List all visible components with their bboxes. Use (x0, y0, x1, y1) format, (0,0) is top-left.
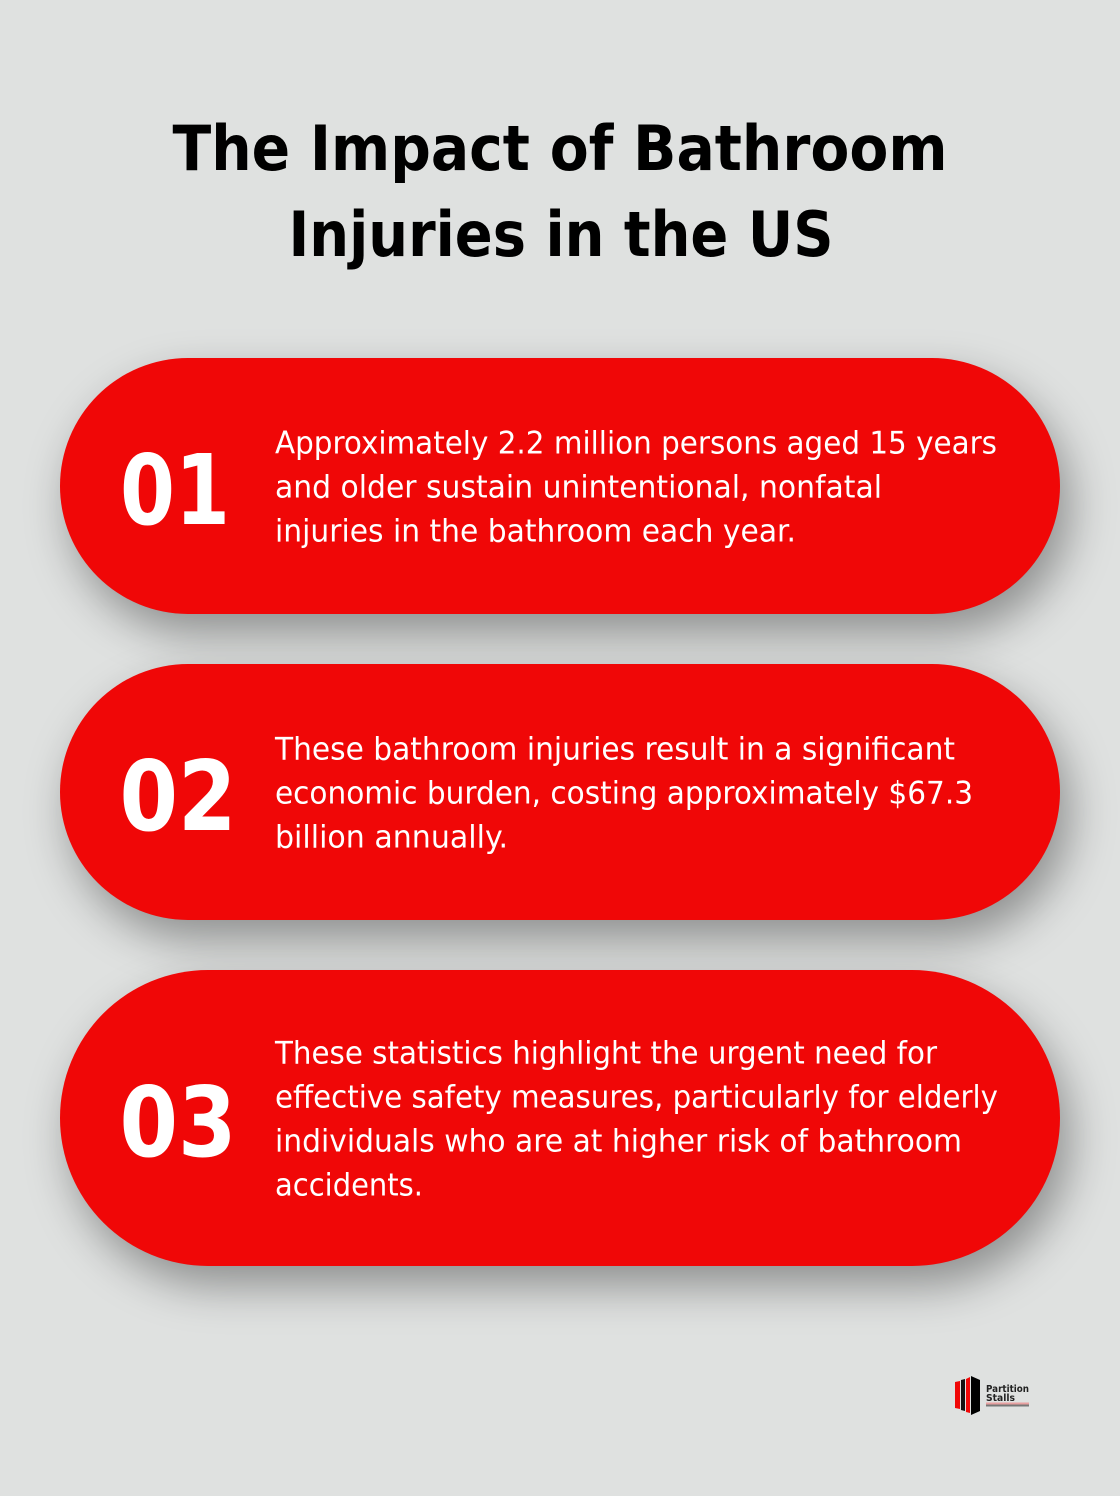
text block: card 01: Approximately 2.2 million persons aged 15 years (275, 426, 997, 462)
title (172, 112, 948, 271)
logo: Partition Stalls: Stalls (986, 1393, 1015, 1404)
text block: card 03: These statistics highlight the urgent need for (274, 1036, 937, 1072)
title: Injuries in the US (288, 198, 834, 271)
logo: Partition Stalls: Partition (986, 1384, 1029, 1395)
text block: card 03: individuals who are at higher risk of bathroom (275, 1124, 962, 1160)
text block: card 02: These bathroom injuries result in a significant (274, 732, 955, 768)
panel: card 01 background (60, 358, 1060, 614)
text block: card 03: effective safety measures, particularly for elderly (275, 1080, 998, 1116)
text block: card 01: and older sustain unintentional, nonfatal (275, 470, 882, 506)
title: The Impact of Bathroom (172, 112, 948, 185)
text block: card 03 (274, 1036, 998, 1204)
text block: card 03: accidents. (275, 1168, 423, 1204)
text block: card 01: injuries in the bathroom each year. (275, 514, 796, 550)
panel: card 02 background (60, 664, 1060, 920)
number 03: 03 (120, 1065, 236, 1179)
logo: Partition Stalls (955, 1376, 1029, 1415)
panel: card 03 background (60, 970, 1060, 1266)
text block: card 01 (275, 426, 997, 550)
text block: card 02 (274, 732, 973, 856)
number 02: 02 (120, 739, 236, 853)
text block: card 02: economic burden, costing approximately $67.3 (275, 776, 973, 812)
number 01: 01 (120, 433, 230, 547)
text block: card 02: billion annually. (275, 820, 508, 856)
